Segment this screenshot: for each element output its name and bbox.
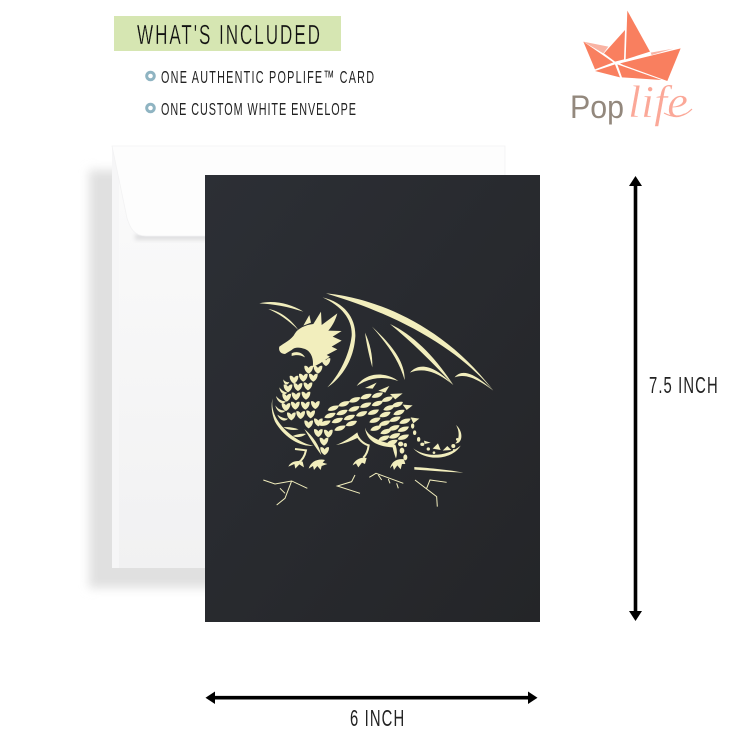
dragon neck scales xyxy=(275,358,333,455)
envelope flap shadow xyxy=(135,234,225,240)
list of included items xyxy=(147,68,374,120)
dragon legs and feet xyxy=(272,398,405,470)
dragon tail xyxy=(411,423,461,458)
envelope shadow xyxy=(89,170,219,588)
dragon back spikes xyxy=(365,383,419,423)
icon: paper boat xyxy=(583,11,681,81)
pop-up card xyxy=(205,175,540,622)
label: 7.5 inch: 7.5 INCH xyxy=(649,373,718,399)
logo wordmark: life xyxy=(628,76,688,127)
ground line xyxy=(414,467,463,473)
envelope body xyxy=(112,146,505,568)
arrow: card width xyxy=(206,692,538,704)
dragon head xyxy=(279,312,342,367)
heading: what's included: WHAT'S INCLUDED xyxy=(137,19,320,50)
item: poplife card: ONE AUTHENTIC POPLIFE™ CARD xyxy=(161,68,374,88)
card front xyxy=(205,175,540,622)
dragon body scales xyxy=(319,392,411,460)
dragon wings xyxy=(259,293,493,391)
arrow: card height xyxy=(629,176,642,621)
envelope flap xyxy=(112,146,505,236)
poplife logo xyxy=(570,11,692,127)
envelope with shadow xyxy=(89,146,505,588)
logo wordmark xyxy=(570,76,692,127)
dragon cut-out xyxy=(259,293,493,507)
logo wordmark: Pop xyxy=(570,89,624,125)
ground cracks xyxy=(263,473,447,507)
item: white envelope: ONE CUSTOM WHITE ENVELOPE xyxy=(161,100,356,120)
label: 6 inch: 6 INCH xyxy=(350,706,404,732)
